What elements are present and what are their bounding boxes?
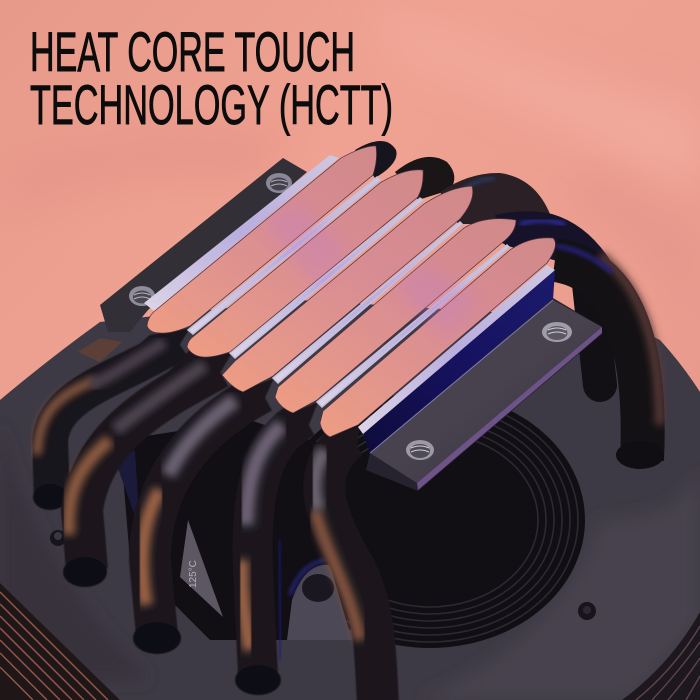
silver strips <box>144 155 555 434</box>
plate 3 <box>222 186 473 392</box>
heat pipes: left side bends <box>33 328 378 700</box>
hole <box>266 173 292 193</box>
left mounting bracket <box>78 158 307 362</box>
plate 4 <box>275 219 516 413</box>
title: TECHNOLOGY (HCTT) <box>30 73 393 136</box>
pipe 2 <box>63 350 232 587</box>
title: HEAT CORE TOUCH <box>30 20 355 83</box>
pipe 5 <box>310 426 378 700</box>
pipe 4 <box>235 402 318 695</box>
hole <box>542 322 572 342</box>
central fin stack <box>115 392 585 648</box>
125C marking: 125°C <box>188 560 199 588</box>
title <box>30 20 393 136</box>
lower fins right <box>622 612 700 700</box>
curved heat pipe ends, right side <box>355 141 615 268</box>
small screw on plate right <box>578 602 596 620</box>
hole <box>406 440 434 460</box>
plate 1 <box>147 146 377 333</box>
gray label wedge <box>180 520 223 617</box>
pipe 1 <box>33 328 190 510</box>
lower fins left <box>0 583 120 700</box>
plate 5 <box>320 238 555 437</box>
plate 2 <box>187 170 423 357</box>
pipe 3 <box>133 378 274 654</box>
cooler base plate <box>0 300 700 700</box>
violet reflection on copper <box>262 205 480 340</box>
small screw on plate left <box>50 530 66 546</box>
right mounting bracket <box>363 270 602 491</box>
heat pipe: front right <box>555 246 664 469</box>
copper contact plates <box>147 146 555 437</box>
hole <box>129 286 155 306</box>
back vertical heat pipe <box>510 227 600 385</box>
